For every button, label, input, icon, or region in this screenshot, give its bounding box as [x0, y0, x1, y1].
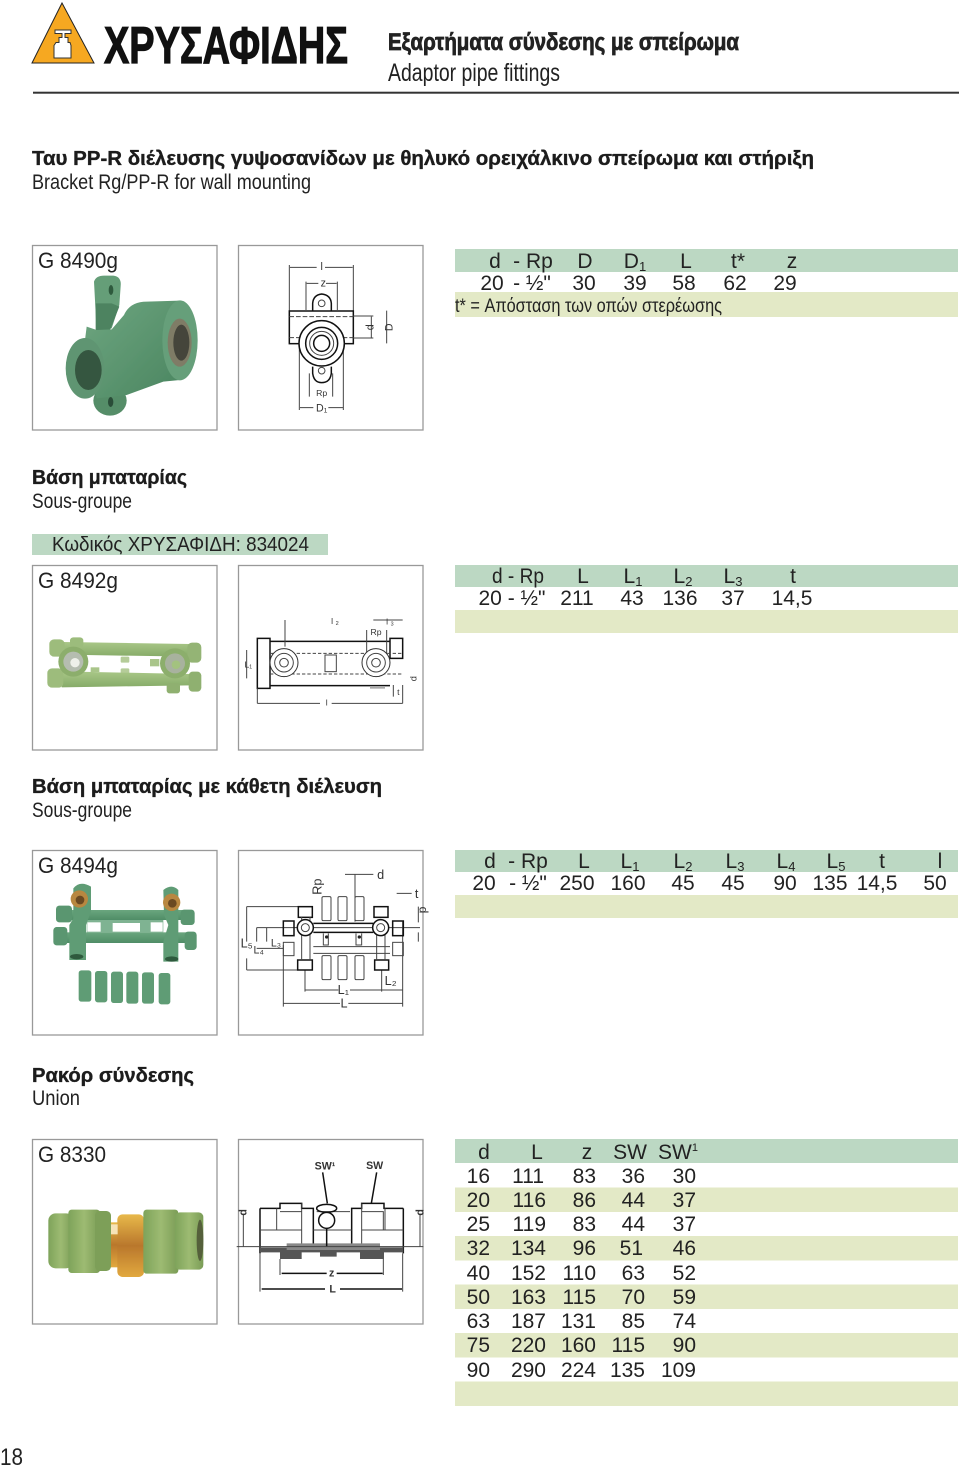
- header row: t*: [731, 250, 745, 273]
- header row: z: [787, 250, 797, 273]
- header row: 1: [632, 859, 639, 874]
- header row: - Rp: [508, 850, 548, 873]
- value rows: 32: [467, 1237, 490, 1260]
- header row: d: [484, 850, 496, 873]
- value rows: 83: [573, 1165, 596, 1188]
- header row: [484, 850, 942, 874]
- section heading: union: Union: [32, 1087, 80, 1110]
- value row: 39: [623, 272, 647, 295]
- header row: t: [790, 565, 796, 588]
- header row: L: [624, 565, 635, 588]
- section heading: base with vertical passage: [32, 776, 382, 822]
- value rows: [467, 1165, 696, 1382]
- section heading: bracket: Ταυ PP-R διέλευσης γυψοσανίδων με θηλυκό ορειχάλκινο σπείρωμα και στήριξη: [32, 148, 814, 170]
- value rows: 83: [573, 1213, 596, 1236]
- technical drawing: L: [329, 1283, 336, 1295]
- technical drawing: L₃: [271, 938, 281, 950]
- header row: L: [680, 250, 692, 273]
- header row: L: [674, 565, 685, 588]
- section heading: base: [32, 467, 187, 513]
- header row: 4: [788, 859, 795, 874]
- value rows: 16: [467, 1165, 490, 1188]
- product code: G 8492g: [38, 568, 118, 593]
- value rows: 85: [622, 1310, 645, 1333]
- panel: G 8330 photo: [32, 1140, 217, 1324]
- panel: G 8494g drawing: [238, 850, 430, 1035]
- value rows: 115: [612, 1334, 645, 1357]
- header row: L: [621, 850, 632, 873]
- header row: 3: [737, 859, 744, 874]
- value rows: 220: [511, 1334, 546, 1357]
- value row: 136: [662, 587, 698, 610]
- value row: 14,5: [772, 587, 812, 610]
- header row: t: [879, 850, 885, 873]
- value row: 14,5: [857, 872, 897, 895]
- value rows: 290: [511, 1359, 546, 1382]
- value rows: 46: [673, 1237, 696, 1260]
- header row: L: [777, 850, 788, 873]
- technical drawing: l: [326, 697, 328, 707]
- panel: G 8494g photo: [32, 850, 217, 1035]
- header row: d: [489, 250, 501, 273]
- panel: G 8492g drawing: [238, 566, 423, 750]
- technical drawing: d: [416, 907, 430, 913]
- technical drawing: [244, 616, 419, 707]
- value row: 20: [472, 872, 496, 895]
- technical drawing: L₁: [338, 983, 349, 997]
- header row: 1: [639, 259, 646, 274]
- technical drawing: [237, 1160, 426, 1295]
- header row: L: [827, 850, 838, 873]
- technical drawing: [289, 261, 395, 415]
- photo: union fitting: [48, 1210, 203, 1277]
- value row: - ½": [513, 272, 551, 295]
- value rows: 152: [511, 1262, 546, 1285]
- value row: 135: [812, 872, 848, 895]
- header row: [489, 250, 797, 274]
- header row: - Rp: [513, 250, 553, 273]
- technical drawing: Rp: [370, 627, 382, 637]
- value rows: 37: [673, 1213, 696, 1236]
- table: G 8494g dimensions: [455, 850, 958, 918]
- technical drawing: SW: [366, 1160, 384, 1172]
- header row: D: [577, 250, 593, 273]
- brand name: ΧΡΥΣΑΦΙΔΗΣ: [104, 17, 348, 75]
- table: G 8330 dimensions: [455, 1139, 958, 1406]
- product code: G 8330: [38, 1142, 106, 1167]
- value row: 160: [610, 872, 646, 895]
- value rows: 44: [622, 1213, 645, 1236]
- value row: 45: [671, 872, 695, 895]
- technical drawing: [241, 868, 430, 1010]
- technical drawing: L: [340, 996, 348, 1010]
- header row: SW: [658, 1141, 692, 1164]
- technical drawing: l: [320, 261, 323, 273]
- header row: 3: [735, 574, 742, 589]
- photo: wall bracket tee: [66, 276, 198, 416]
- value rows: 70: [622, 1286, 645, 1309]
- value row: 37: [721, 587, 745, 610]
- value rows: 90: [673, 1334, 696, 1357]
- value row: 50: [923, 872, 947, 895]
- logo: valve warning triangle: [32, 3, 94, 63]
- section heading: base: Sous-groupe: [32, 490, 132, 513]
- value row: 250: [559, 872, 595, 895]
- technical drawing: L₅: [241, 937, 253, 951]
- value rows: 135: [610, 1359, 645, 1382]
- header row: 2: [685, 574, 692, 589]
- header row: 2: [685, 859, 692, 874]
- technical drawing: L₂: [385, 974, 397, 988]
- value rows: 75: [467, 1334, 490, 1357]
- technical drawing: Rp: [311, 879, 325, 895]
- value row: 29: [773, 272, 797, 295]
- page title english: Adaptor pipe fittings: [388, 59, 560, 87]
- value rows: 25: [467, 1213, 490, 1236]
- value rows: 50: [467, 1286, 490, 1309]
- value rows: 44: [622, 1189, 645, 1212]
- technical drawing: t: [415, 887, 419, 901]
- value rows: 36: [622, 1165, 645, 1188]
- section heading: base with vertical passage: Βάση μπαταρίας με κάθετη διέλευση: [32, 776, 382, 798]
- footnote: t* = Απόσταση των οπών στερέωσης: [455, 296, 722, 317]
- header row: d: [478, 1141, 490, 1164]
- photo: base with sleeves: [53, 884, 197, 1004]
- header row: L: [724, 565, 735, 588]
- header row: l: [938, 850, 942, 873]
- value row: [480, 272, 797, 295]
- value row: 45: [721, 872, 745, 895]
- header row: L: [726, 850, 737, 873]
- header row: z: [582, 1141, 592, 1164]
- value rows: 163: [511, 1286, 546, 1309]
- header row: 1: [635, 574, 642, 589]
- value rows: 63: [622, 1262, 645, 1285]
- value rows: 86: [573, 1189, 596, 1212]
- page title greek: Εξαρτήματα σύνδεσης με σπείρωμα: [388, 29, 739, 56]
- technical drawing: L₁: [244, 659, 252, 669]
- technical drawing: d: [409, 676, 419, 681]
- value rows: 224: [561, 1359, 596, 1382]
- value rows: 59: [673, 1286, 696, 1309]
- value row: 62: [723, 272, 747, 295]
- section heading: bracket: Bracket Rg/PP-R for wall mounting: [32, 171, 311, 194]
- value rows: 20: [467, 1189, 490, 1212]
- value rows: 111: [512, 1165, 544, 1188]
- technical drawing: D₁: [316, 403, 328, 415]
- header row: L: [577, 565, 589, 588]
- technical drawing: d: [364, 324, 376, 330]
- section heading: union: Ρακόρ σύνδεσης: [32, 1065, 194, 1087]
- section heading: union: [32, 1065, 194, 1110]
- value rows: 134: [511, 1237, 546, 1260]
- header row: [478, 1141, 698, 1164]
- technical drawing: z: [329, 1267, 334, 1279]
- value row: 20: [480, 272, 504, 295]
- value row: 211: [560, 587, 594, 610]
- panel: G 8490g drawing: [238, 246, 423, 430]
- header row: L: [674, 850, 685, 873]
- technical drawing: l ₃: [386, 617, 394, 627]
- value rows: 74: [673, 1310, 696, 1333]
- technical drawing: D: [383, 323, 395, 331]
- header row: 5: [838, 859, 845, 874]
- panel: G 8492g photo: [32, 566, 217, 750]
- header row: [492, 565, 796, 589]
- section heading: base: Βάση μπαταρίας: [32, 467, 187, 489]
- technical drawing: t: [397, 687, 400, 697]
- value row: 30: [572, 272, 596, 295]
- table: G 8492g dimensions: [455, 565, 958, 633]
- header row: SW: [613, 1141, 647, 1164]
- value rows: 40: [467, 1262, 490, 1285]
- value row: 90: [773, 872, 797, 895]
- value rows: 37: [673, 1189, 696, 1212]
- value row: - ½": [509, 872, 547, 895]
- technical drawing: Rp: [316, 388, 327, 398]
- technical drawing: d: [414, 1209, 426, 1216]
- value rows: 52: [673, 1262, 696, 1285]
- value row: 43: [620, 587, 644, 610]
- value rows: 115: [563, 1286, 596, 1309]
- technical drawing: L₄: [254, 944, 264, 956]
- code bar: Κωδικός ΧΡΥΣΑΦΙΔΗ: 834024: [52, 534, 309, 556]
- panel: G 8490g photo: [32, 246, 217, 430]
- technical drawing: l ₂: [331, 616, 339, 626]
- value rows: 119: [513, 1213, 546, 1236]
- value rows: 51: [620, 1237, 643, 1260]
- technical drawing: d: [377, 868, 384, 882]
- value row: 20 - ½": [478, 587, 546, 610]
- panel: G 8330 drawing: [237, 1140, 426, 1324]
- section heading: bracket: [32, 148, 814, 194]
- value rows: 187: [511, 1310, 546, 1333]
- value rows: 90: [467, 1359, 490, 1382]
- header row: d - Rp: [492, 565, 544, 588]
- value row: [478, 587, 812, 610]
- value rows: 63: [467, 1310, 490, 1333]
- product code: G 8490g: [38, 248, 118, 273]
- value row: [472, 872, 947, 895]
- value rows: 160: [561, 1334, 596, 1357]
- header row: D: [624, 250, 639, 273]
- table: G 8490g dimensions: [455, 249, 958, 317]
- photo: double bar base: [47, 637, 201, 693]
- header row: 1: [692, 1142, 698, 1154]
- value rows: 96: [573, 1237, 596, 1260]
- technical drawing: SW¹: [315, 1161, 336, 1173]
- section heading: base with vertical passage: Sous-groupe: [32, 799, 132, 822]
- header row: L: [578, 850, 590, 873]
- technical drawing: z: [321, 278, 326, 290]
- technical drawing: d: [237, 1209, 249, 1216]
- product code: G 8494g: [38, 853, 118, 878]
- value rows: 116: [513, 1189, 546, 1212]
- value rows: 109: [661, 1359, 696, 1382]
- value rows: 131: [561, 1310, 596, 1333]
- value rows: 110: [563, 1262, 596, 1285]
- header row: L: [531, 1141, 543, 1164]
- value row: 58: [672, 272, 696, 295]
- value rows: 30: [673, 1165, 696, 1188]
